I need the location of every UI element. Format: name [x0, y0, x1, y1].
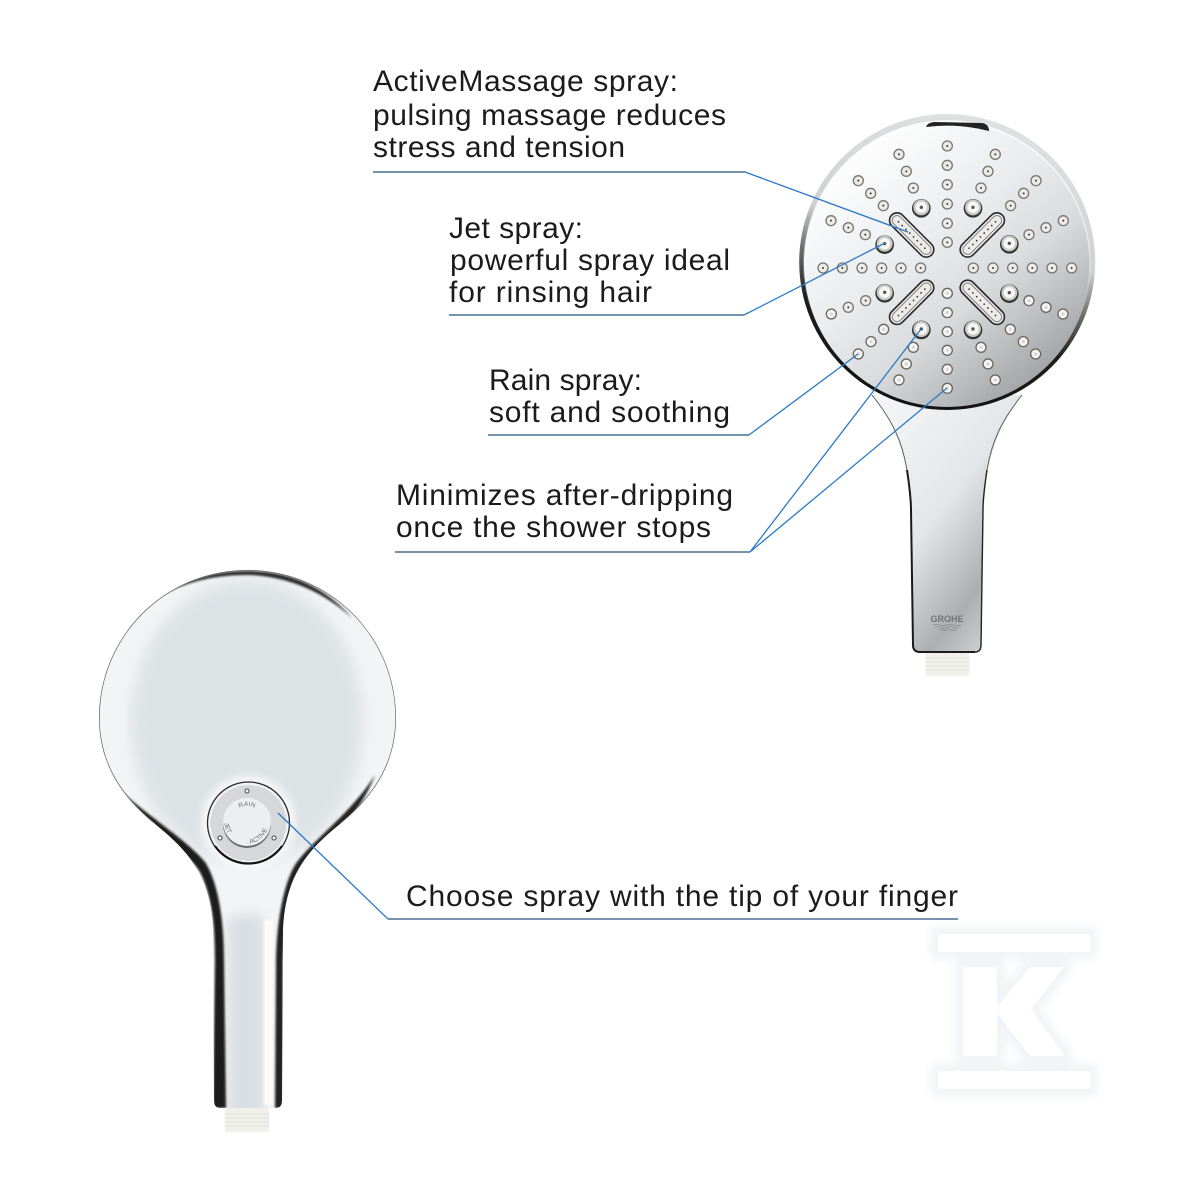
callout: Jet spray: powerful spray ideal	[450, 244, 730, 277]
massage pills	[896, 220, 998, 318]
watermark logo	[938, 934, 1090, 1089]
callout: Minimizes after-dripping	[395, 329, 947, 552]
rain nozzles	[818, 141, 1077, 393]
callout: ActiveMassage spray	[373, 65, 908, 232]
knob label: JET: JET	[224, 823, 232, 832]
logo: GROHE	[930, 614, 964, 631]
connector: front	[925, 652, 970, 676]
callout: Minimizes after-dripping: Minimizes after-dripping	[396, 479, 733, 512]
callout: Rain spray: Rain spray:	[489, 364, 642, 397]
body: back	[95, 565, 400, 1120]
front view shower head	[799, 114, 1095, 676]
callout: ActiveMassage spray: ActiveMassage spray:	[373, 65, 678, 98]
notch	[926, 122, 989, 131]
knob label: ACTIVE: ACTIVE	[250, 828, 268, 844]
callout: Rain spray	[488, 354, 858, 435]
logo: GROHE: GROHE	[930, 614, 964, 625]
back view shower head	[99, 570, 396, 1132]
callout: Rain spray: soft and soothing	[489, 396, 730, 429]
callout: Jet spray: for rinsing hair	[449, 276, 652, 309]
selector knob	[200, 774, 297, 868]
jet nozzles	[875, 199, 1019, 339]
handle: front	[872, 395, 1022, 652]
callout: Jet spray: Jet spray:	[449, 212, 583, 245]
spray face	[804, 121, 1090, 407]
callout: Minimizes after-dripping: once the shower stops	[396, 511, 711, 544]
connector: back	[224, 1108, 270, 1132]
callout: Choose spray	[278, 813, 958, 919]
nozzles	[818, 141, 1077, 393]
callout: ActiveMassage spray: stress and tension	[373, 131, 625, 164]
callout: Jet spray	[449, 212, 885, 315]
spray head rim	[799, 114, 1095, 410]
callout: ActiveMassage spray: pulsing massage reduces	[373, 99, 726, 132]
callout: Choose spray: Choose spray with the tip of your finger	[406, 880, 958, 913]
knob label: RAIN: RAIN	[238, 802, 256, 808]
